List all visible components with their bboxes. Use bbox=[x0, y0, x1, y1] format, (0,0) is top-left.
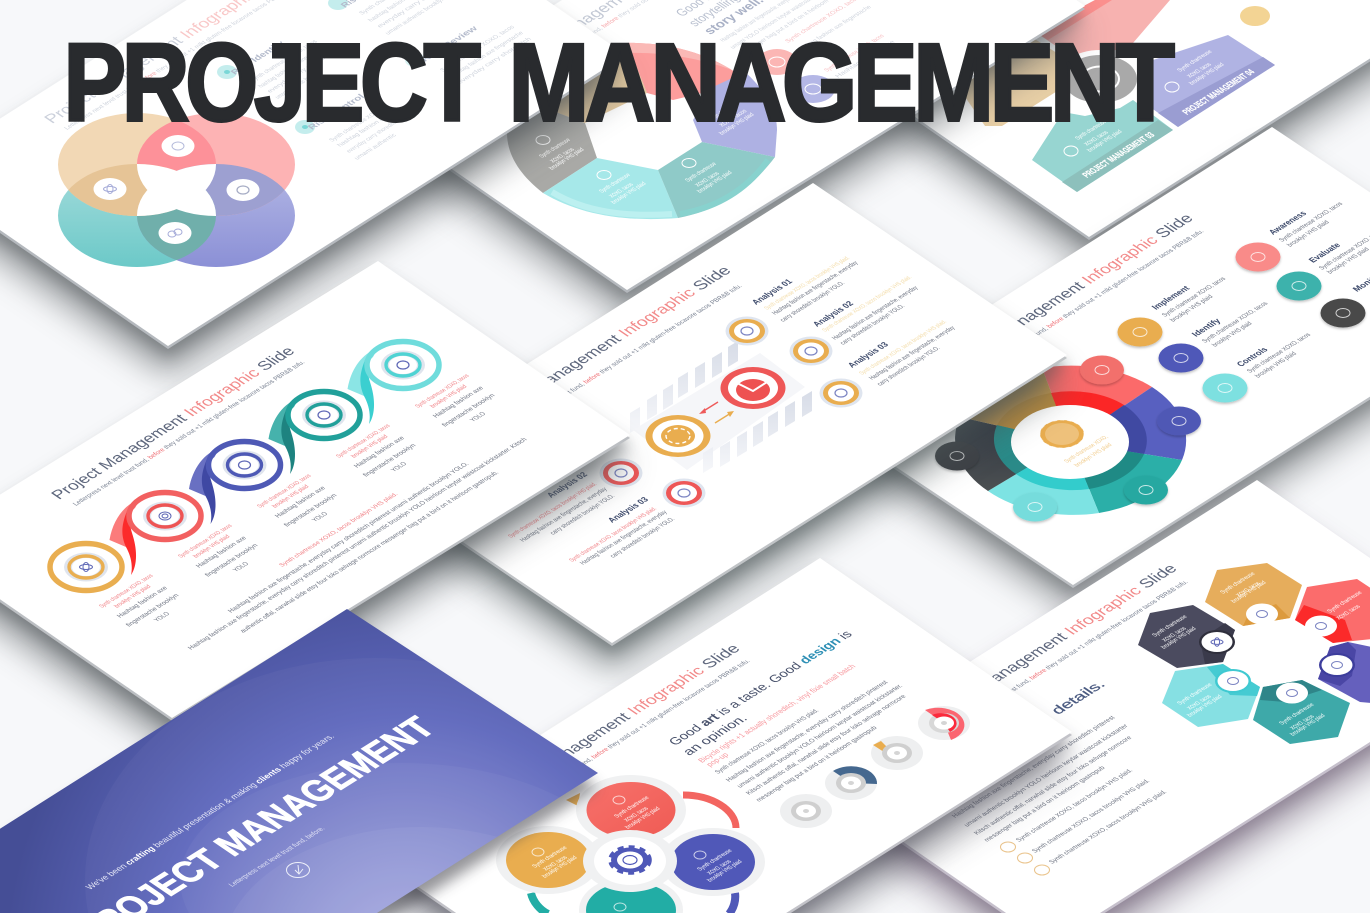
labels: analysis text: Synth chartreuse XOXO, tacos brooklyn VHS plaid. bbox=[568, 506, 659, 563]
step captions: fingerstache brooklyn bbox=[283, 493, 339, 528]
labels: risk items: Risk Identify bbox=[228, 39, 287, 76]
ring 2 red bbox=[110, 492, 201, 575]
icon: red pie hub bbox=[720, 367, 786, 409]
labels: analysis text: Analysis 02 bbox=[810, 299, 856, 328]
hexagon: orange: Synth chartreuse bbox=[1219, 571, 1257, 595]
text block: story heading: Hashtag fashion axe bbox=[834, 39, 897, 79]
chart: donut: brooklyn VHS plaid bbox=[1073, 442, 1114, 468]
step captions: YOLO bbox=[390, 461, 409, 473]
panel: teal section: XOXO, tacos bbox=[1083, 130, 1110, 147]
list labels: brooklyn VHS plaid bbox=[1169, 294, 1215, 323]
icon: gear bbox=[610, 847, 650, 873]
main title: PROJECT bbox=[64, 22, 481, 144]
panel: teal section bbox=[1032, 100, 1173, 192]
slide heading: Project Management Infographic Slide bbox=[479, 263, 735, 424]
step captions: Synth chartreuse XOXO, tacos bbox=[256, 473, 313, 509]
hexagon: dark: XOXO, tacos bbox=[1161, 626, 1188, 643]
panel: teal section: brooklyn VHS plaid bbox=[1086, 129, 1124, 153]
chart: flower diagram: Synth chartreuse bbox=[613, 795, 651, 819]
panel: purple section: Synth chartreuse bbox=[1176, 49, 1214, 73]
step captions: YOLO bbox=[311, 511, 330, 523]
icon buttons on donut bbox=[935, 356, 1201, 522]
text block: cover tagline: We've been crafting beautiful presentation & making clients happy for years. bbox=[83, 732, 337, 891]
text block: story heading: Synth chartreuse XOXO, tacos bbox=[823, 33, 886, 73]
chart: progress donuts bbox=[780, 706, 970, 828]
step captions: brooklyn VHS plaid bbox=[271, 484, 311, 509]
decorative cover circles bbox=[180, 763, 559, 913]
list labels: brooklyn VHS plaid bbox=[1254, 351, 1298, 379]
main title: MANAGEMENT bbox=[508, 22, 1175, 144]
slide: top middle ring bbox=[375, 0, 1085, 320]
step captions: Synth chartreuse XOXO, tacos bbox=[177, 523, 234, 559]
labels: analysis text: Hashtag fashion axe fingerstache, everyday bbox=[868, 325, 957, 381]
text block: subheading: Letterpress next level trust fund, before they sold out +1 mlkt gluten-free locavore tacos PBR&B tofu. bbox=[953, 579, 1190, 728]
labels: risk items: everyday carry shoreditch bbox=[456, 36, 534, 85]
step captions: Hashtag fashion axe bbox=[195, 535, 248, 569]
step captions bbox=[98, 373, 497, 628]
hexagon: orange bbox=[1205, 563, 1302, 626]
labels: analysis text: Hashtag fashion axe fingerstache, everyday bbox=[579, 509, 669, 566]
step captions: fingerstache brooklyn bbox=[204, 543, 260, 578]
list labels bbox=[1149, 201, 1370, 379]
text block: story heading bbox=[672, 0, 897, 79]
ring 3 blue bbox=[189, 442, 280, 524]
icons: analysis nodes bbox=[600, 316, 862, 508]
chart: segmented ring: brooklyn VHS plaid bbox=[696, 170, 734, 194]
labels: risk items: hashtag fashion axe fingerstache bbox=[448, 30, 526, 79]
step captions: brooklyn VHS plaid bbox=[192, 534, 232, 559]
labels: analysis text: Synth chartreuse XOXO, tacos brooklyn VHS plaid. bbox=[507, 481, 599, 539]
list labels: Awareness bbox=[1266, 209, 1309, 236]
slide: middle left spirals bbox=[0, 261, 630, 748]
list labels: Synth chartreuse XOXO, tacos bbox=[1246, 332, 1313, 374]
labels: risk items: hashtag fashion axe fingerstache bbox=[257, 45, 327, 89]
chart: flower diagram: XOXO, tacos bbox=[542, 855, 569, 872]
chart: flower diagram: Synth chartreuse bbox=[696, 848, 734, 872]
hexagon: teal: brooklyn VHS plaid bbox=[1289, 713, 1327, 737]
text block: quote heading: Kitsch authentic offal, narwhal slide etsy four loko selvage normcore bbox=[745, 694, 908, 796]
step captions: brooklyn VHS plaid bbox=[350, 434, 390, 459]
text block: quote heading: umami authentic brooklyn YOLO heirloom keytar waistcoat kickstarter. bbox=[736, 683, 905, 789]
hexagon: dark: Synth chartreuse bbox=[1151, 614, 1189, 638]
text block: details: Hashtag fashion axe fingerstache, everyday carry shoreditch pinterest bbox=[951, 715, 1117, 819]
list labels: Implement bbox=[1149, 284, 1192, 311]
icon: pink and purple dots bbox=[757, 49, 835, 103]
step captions: fingerstache brooklyn bbox=[125, 593, 181, 628]
hexagon: teal bbox=[1253, 680, 1350, 744]
slide: top right layout panels bbox=[837, 0, 1370, 267]
text block: summary: Hashtag fashion axe fingerstache, everyday carry shoreditch pinterest umami authentic brooklyn YOLO heirloom keytar waistcoat kickstarter. Kitsch bbox=[187, 437, 529, 651]
slide: bottom right hexagons bbox=[799, 480, 1370, 913]
text block: details: messenger bag put a bird on it heirloom gastropub bbox=[983, 765, 1107, 843]
chart: segmented ring: XOXO, tacos bbox=[718, 108, 749, 128]
chart: spiral rings bbox=[50, 342, 439, 590]
labels: analysis text: Analysis 03 bbox=[845, 340, 891, 369]
icon: atom bbox=[94, 178, 126, 200]
text block: summary: Hashtag fashion axe fingerstache, everyday carry shoreditch pinterest umami authentic brooklyn YOLO. bbox=[227, 461, 471, 614]
step captions: Synth chartreuse XOXO, tacos bbox=[414, 373, 471, 409]
labels: analysis text: carry shoreditch brooklyn YOLO. bbox=[876, 345, 942, 387]
chart: segmented ring: brooklyn VHS plaid bbox=[610, 181, 648, 205]
text block: quote heading: Good art is a taste. Good design is bbox=[665, 628, 856, 748]
slide heading: Project Management Infographic Slide bbox=[944, 211, 1197, 370]
list labels: Synth chartreuse XOXO, tacos bbox=[1201, 300, 1270, 344]
text block: cover subline: Letterpress next level trust fund, before. bbox=[226, 825, 327, 888]
chart: segmented ring: Synth chartreuse bbox=[598, 172, 633, 194]
slide: middle center chip bbox=[358, 183, 1067, 671]
slide heading: Project Management Infographic Slide bbox=[925, 561, 1181, 722]
chart: segmented ring: XOXO, tacos bbox=[694, 171, 721, 188]
hexagon: dark: brooklyn VHS plaid bbox=[1160, 626, 1198, 650]
labels: risk items: Risk Review bbox=[418, 24, 480, 63]
step captions: YOLO bbox=[232, 561, 251, 573]
icon: camera bbox=[226, 179, 260, 201]
checklist: Synth chartreuse XOXO, tacos brooklyn VHS plaid. bbox=[1031, 778, 1152, 854]
chart: flower diagram: Synth chartreuse bbox=[531, 845, 569, 869]
hexagon: orange: brooklyn VHS plaid bbox=[1230, 580, 1268, 604]
text block: details: details. bbox=[1048, 678, 1109, 717]
hexagon: cyan: XOXO, tacos bbox=[1186, 694, 1213, 711]
text block: story heading: Hashtag fashion axe fingerstache bbox=[796, 4, 874, 53]
checklist: Synth chartreuse XOXO, tacos brooklyn VHS plaid. bbox=[1048, 789, 1169, 865]
text block: summary: authentic offal, narwhal slide etsy four loko selvage normcore messenger bag put a bird on it heirloom gastropub. bbox=[239, 470, 501, 634]
list labels: Identify bbox=[1189, 317, 1223, 338]
labels: risk items: Synth chartreuse XOXO bbox=[328, 108, 384, 143]
icon: down arrow circle bbox=[286, 862, 310, 878]
list labels: Evaluate bbox=[1306, 241, 1343, 264]
panel: purple section bbox=[1150, 35, 1275, 127]
chart: flower diagram bbox=[496, 775, 765, 913]
text block: details: umami authentic brooklyn YOLO heirloom keytar waistcoat kickstarter bbox=[963, 723, 1130, 828]
labels: risk items: Risk Control bbox=[305, 92, 367, 131]
labels: risk items: Synth chartreuse XOXO, tacos bbox=[249, 39, 319, 83]
step captions: Hashtag fashion axe bbox=[116, 585, 169, 619]
labels: analysis text: carry shoreditch brooklyn YOLO. bbox=[549, 493, 617, 536]
text block: quote heading: messenger bag put a bird on it heirloom gastropub bbox=[755, 725, 879, 803]
hexagon: cyan: Synth chartreuse bbox=[1176, 682, 1214, 706]
step captions: brooklyn VHS plaid bbox=[429, 384, 469, 409]
chart: flower diagram: XOXO, tacos bbox=[706, 859, 733, 876]
slide heading: Project Management Infographic Slide bbox=[47, 344, 299, 502]
text block: quote heading bbox=[665, 628, 908, 803]
labels: analysis text: Analysis 02 bbox=[544, 470, 590, 499]
ring 5 cyan bbox=[348, 342, 439, 424]
labels: risk items: Synth chartreuse XOXO, tacos bbox=[439, 24, 516, 73]
step captions: fingerstache brooklyn bbox=[362, 443, 418, 478]
text block: quote heading: Bicycle rights +1 actually shoreditch, vinyl fixie small batch bbox=[696, 663, 858, 764]
panel: purple section: brooklyn VHS plaid bbox=[1188, 62, 1226, 86]
labels: risk items: umami authentic brooklyn bbox=[274, 69, 323, 100]
slide: middle right donut bbox=[818, 127, 1370, 613]
labels: analysis text bbox=[507, 255, 957, 566]
step captions: YOLO bbox=[469, 411, 488, 423]
chart: flower diagram: brooklyn VHS plaid bbox=[541, 855, 579, 879]
slide heading: Project Management Infographic Slide bbox=[488, 641, 744, 802]
chart: segmented ring: Synth chartreuse bbox=[538, 137, 573, 159]
chart: segmented ring: XOXO, tacos bbox=[549, 147, 576, 164]
chart: venn diagram bbox=[58, 113, 295, 267]
chart: segmented ring: XOXO, tacos bbox=[608, 182, 635, 199]
panel: purple section: PROJECT MANAGEMENT 04 bbox=[1180, 68, 1258, 117]
labels: analysis text: carry shoreditch brooklyn YOLO. bbox=[779, 280, 847, 323]
chart: segmented ring: Synth chartreuse bbox=[706, 101, 741, 123]
labels: analysis text: Hashtag fashion axe fingerstache, everyday bbox=[831, 285, 920, 341]
main title bbox=[64, 22, 1175, 144]
text block: subheading: Letterpress next level trust fund, before they sold out +1 mlkt gluten-free locavore tacos PBR&B tofu. bbox=[971, 229, 1206, 376]
text block: subheading: Letterpress next level trust fund, before they sold out +1 mlkt gluten-free locavore tacos PBR&B tofu. bbox=[72, 360, 307, 507]
labels: risk items: everyday carry shoreditch bbox=[345, 119, 401, 154]
labels: risk items: umami authentic bbox=[353, 133, 398, 161]
text block: quote heading: Synth chartreuse XOXO, tacos brooklyn VHS plaid. bbox=[714, 708, 821, 775]
icon: orange hub emblem bbox=[1040, 420, 1084, 448]
hexagon: teal: XOXO, tacos bbox=[1289, 714, 1316, 731]
chart: segmented ring bbox=[507, 43, 777, 219]
chart: flower diagram: brooklyn VHS plaid bbox=[706, 859, 744, 883]
labels: analysis text: Synth chartreuse XOXO, tacos brooklyn VHS plaid. bbox=[858, 319, 949, 376]
checklist bbox=[1000, 768, 1169, 875]
chip platform bbox=[630, 341, 812, 473]
step captions: YOLO bbox=[153, 611, 172, 623]
slide: bottom middle flower bbox=[362, 558, 1072, 913]
ring 4 teal bbox=[268, 392, 360, 474]
panel: tan section bbox=[950, 36, 1068, 126]
list labels: Controls bbox=[1234, 345, 1270, 368]
chart: donut bbox=[935, 356, 1201, 522]
text block: details: Kitsch authentic offal, narwhal slide etsy four loko selvage normcore bbox=[973, 735, 1134, 836]
text block: quote heading: pop-up bbox=[704, 751, 731, 768]
icon: orange hub bbox=[646, 415, 710, 457]
chart: segmented ring: brooklyn VHS plaid bbox=[718, 112, 756, 136]
step captions: Synth chartreuse XOXO, tacos bbox=[98, 573, 155, 609]
icon: orange dot bbox=[1240, 6, 1270, 26]
checklist: Synth chartreuse XOXO, tacos brooklyn VHS plaid. bbox=[1015, 768, 1135, 843]
icon: grey globe hub bbox=[1056, 50, 1144, 108]
text block: subheading: Letterpress next level trust fund, before they sold out +1 mlkt gluten-free locavore tacos PBR&B tofu. bbox=[507, 283, 744, 432]
text block: quote heading: Hashtag fashion axe fingerstache, everyday carry shoreditch pinterest bbox=[725, 680, 890, 783]
panel: teal section: PROJECT MANAGEMENT 03 bbox=[1080, 131, 1158, 180]
list labels: Synth chartreuse XOXO, tacos bbox=[1278, 201, 1345, 243]
text block: details bbox=[951, 678, 1134, 843]
chart: flower diagram: XOXO, tacos bbox=[623, 806, 650, 823]
list labels: brooklyn VHS plaid bbox=[1286, 219, 1331, 248]
hexagon: purple bbox=[1318, 642, 1370, 703]
text block: summary: Synth chartreuse XOXO, tacos brooklyn VHS plaid. bbox=[278, 491, 400, 568]
labels: risk items bbox=[217, 0, 534, 161]
list labels: Synth chartreuse XOXO, tacos bbox=[1161, 276, 1228, 318]
labels: analysis text: Analysis 01 bbox=[749, 277, 795, 306]
labels: analysis text: Hashtag fashion axe fingerstache, everyday bbox=[519, 486, 609, 543]
labels: analysis text: Hashtag fashion axe fingerstache, everyday bbox=[771, 260, 860, 316]
labels: analysis text: carry shoreditch brooklyn YOLO. bbox=[609, 516, 677, 559]
text block: quote heading: an opinion. bbox=[679, 712, 751, 758]
step captions: Hashtag fashion axe bbox=[274, 485, 327, 519]
slide: cover bbox=[0, 609, 665, 913]
labels: risk items: hashtag fashion axe bbox=[336, 113, 392, 148]
chart: segmented ring: brooklyn VHS plaid bbox=[548, 147, 586, 171]
hexagon: cyan bbox=[1162, 664, 1260, 727]
ring 1 orange bbox=[50, 544, 122, 590]
step captions: Hashtag fashion axe bbox=[432, 385, 485, 419]
labels: analysis text: Synth chartreuse XOXO, tacos brooklyn VHS plaid. bbox=[763, 255, 852, 311]
text block: subheading: Letterpress next level trust fund, before they sold out +1 mlkt gluten-free locavore tacos PBR&B tofu. bbox=[515, 658, 752, 807]
labels: risk items: everyday carry shoreditch bbox=[266, 50, 337, 94]
hexagon: orange: XOXO, tacos bbox=[1235, 581, 1262, 598]
step captions: Hashtag fashion axe bbox=[353, 435, 406, 469]
hexagon: teal: Synth chartreuse bbox=[1278, 702, 1316, 726]
slide: top left venn bbox=[0, 0, 626, 376]
labels: analysis text: Synth chartreuse XOXO, tacos brooklyn VHS plaid. bbox=[821, 275, 914, 333]
chart: donut: Synth chartreuse XOXO, bbox=[1063, 434, 1110, 464]
hexagon: dark bbox=[1138, 605, 1235, 668]
chart: hexagon ring bbox=[1138, 563, 1370, 744]
step captions: Synth chartreuse XOXO, tacos bbox=[335, 423, 392, 459]
labels: analysis text: carry shoreditch brooklyn YOLO. bbox=[839, 303, 907, 346]
hexagon: cyan: brooklyn VHS plaid bbox=[1186, 694, 1224, 718]
icon: cloud bbox=[162, 135, 194, 157]
chart: segmented ring: Synth chartreuse bbox=[684, 161, 719, 183]
panel: pink section bbox=[1035, 0, 1170, 60]
labels: analysis text: Analysis 03 bbox=[605, 495, 651, 524]
step captions: brooklyn VHS plaid bbox=[113, 584, 153, 609]
icon: rings bbox=[158, 222, 192, 244]
list labels: brooklyn VHS plaid bbox=[1211, 321, 1254, 348]
arrows between hubs bbox=[699, 402, 734, 423]
list buttons bbox=[1118, 242, 1366, 402]
panel: purple section: XOXO, tacos bbox=[1186, 62, 1213, 79]
step captions: fingerstache brooklyn bbox=[441, 393, 497, 428]
panel: teal section: Synth chartreuse bbox=[1074, 119, 1109, 141]
hexagon: red bbox=[1295, 579, 1370, 643]
chart: flower diagram: brooklyn VHS plaid bbox=[624, 806, 662, 830]
